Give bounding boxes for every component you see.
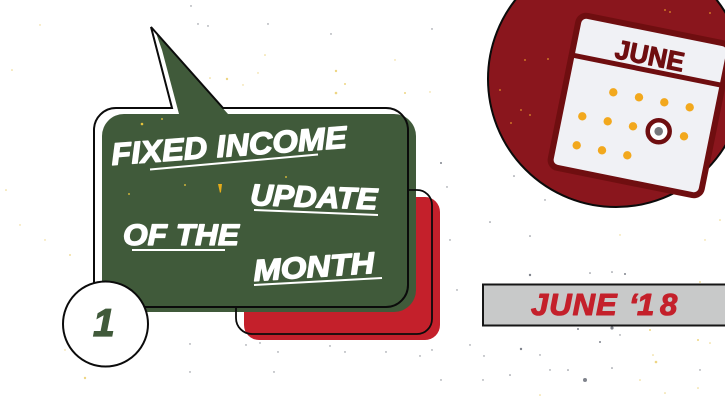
red backing card [244, 197, 440, 340]
date banner: 8 [660, 287, 678, 322]
calendar month label: JUNE [613, 34, 687, 78]
green speech bubble [102, 33, 416, 312]
date banner: ‘ [629, 287, 638, 322]
icon: calendar [547, 14, 725, 197]
red card outline [236, 190, 432, 334]
heading line: of the: OF THE [123, 219, 240, 252]
heading line: fixed income: FIXED INCOME [110, 120, 349, 172]
calendar day dots [572, 88, 694, 160]
heading line: update: UPDATE [250, 179, 379, 216]
calendar selected day [648, 120, 670, 142]
number badge [63, 282, 148, 366]
dark red circle [488, 0, 725, 207]
number badge: 1 [93, 302, 115, 345]
speech bubble outline [94, 27, 408, 307]
date banner: JUNE [531, 287, 618, 322]
date banner [483, 284, 725, 326]
date banner: 1 [637, 287, 654, 322]
heading line: month: MONTH [252, 247, 377, 288]
